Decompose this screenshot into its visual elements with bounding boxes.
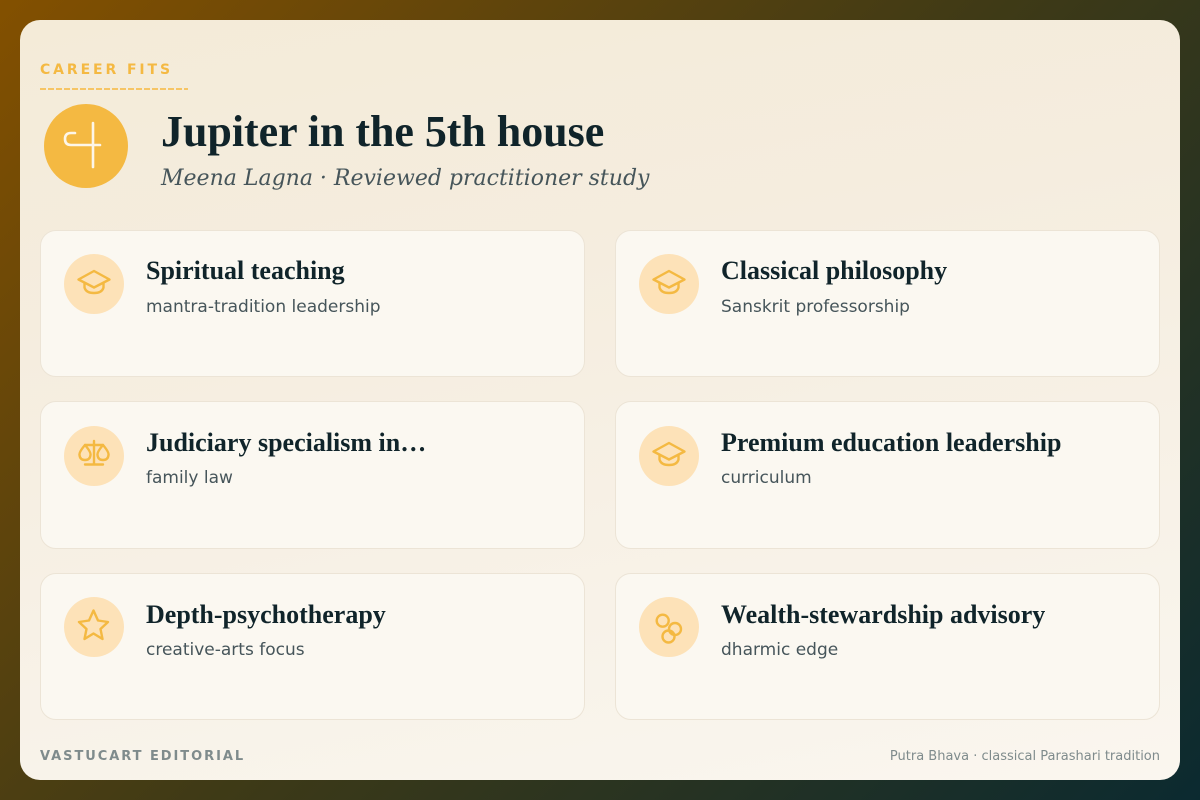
eyebrow label: CAREER FITS [40,62,173,78]
footer: source note: Putra Bhava · classical Parashari tradition [890,749,1160,764]
card: Classical philosophy [615,230,1160,377]
card subtitle: family law [146,468,233,488]
icon: coins [639,597,699,657]
card subtitle: creative-arts focus [146,640,305,660]
card title: Premium education leadership [721,428,1061,457]
card: Spiritual teaching [40,230,585,377]
icon: graduation cap [639,426,699,486]
card title: Spiritual teaching [146,256,345,285]
card subtitle: curriculum [721,468,812,488]
card: Premium education leadership [615,401,1160,549]
card subtitle: Sanskrit professorship [721,297,910,317]
footer: brand: VASTUCART EDITORIAL [40,749,245,764]
card subtitle: dharmic edge [721,640,838,660]
card title: Depth-psychotherapy [146,600,386,629]
icon: graduation cap [639,254,699,314]
card: Depth-psychotherapy [40,573,585,720]
card title: Wealth-stewardship advisory [721,600,1045,629]
card title: Judiciary specialism in… [146,428,426,457]
icon: star [64,597,124,657]
card subtitle: mantra-tradition leadership [146,297,380,317]
card: Judiciary specialism [40,401,585,549]
icon: scales [64,426,124,486]
card title: Classical philosophy [721,256,947,285]
icon: graduation cap [64,254,124,314]
title: Jupiter in the 5th house [161,107,604,156]
icon: Jupiter glyph badge [44,104,128,188]
dashed rule under eyebrow [40,88,188,90]
card: Wealth-stewardship advisory [615,573,1160,720]
subtitle: Meena Lagna · Reviewed practitioner study [161,166,649,191]
